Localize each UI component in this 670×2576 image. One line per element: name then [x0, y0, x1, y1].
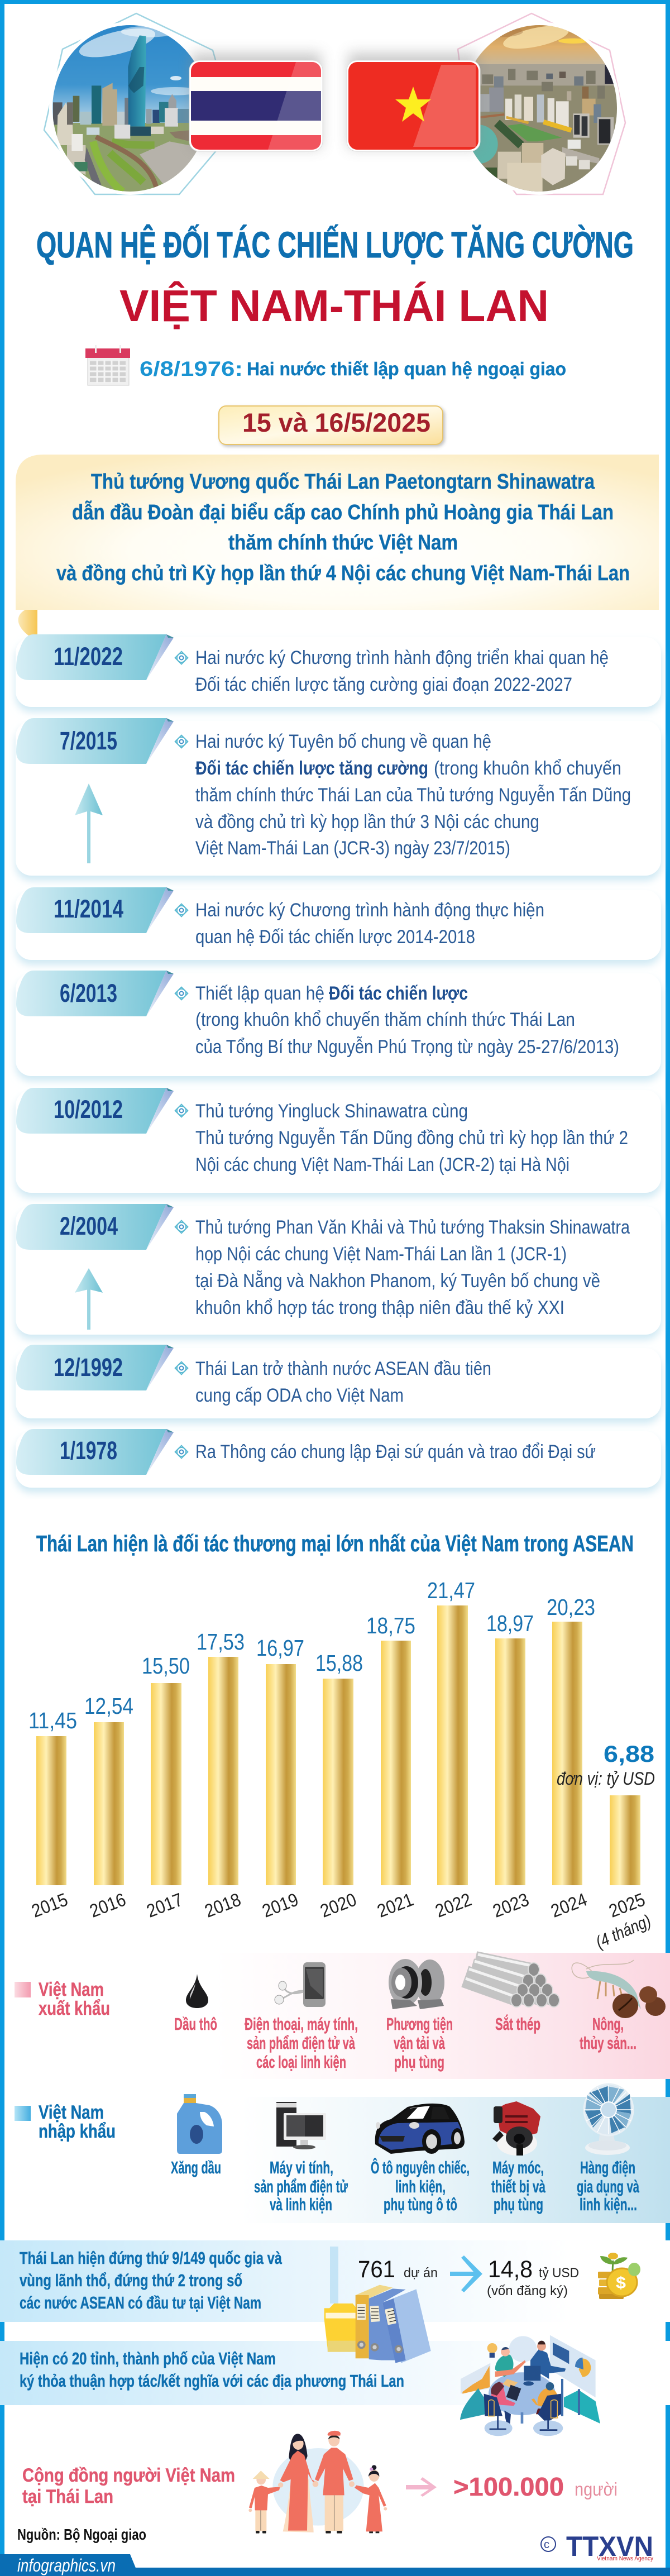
export labels: Nông, [592, 2014, 624, 2034]
bar chart: trade value: 11,45 [28, 1708, 77, 1733]
bar chart: trade value: 2017 [143, 1889, 185, 1922]
timeline: 7/2015: (trong khuôn khổ chuyến [434, 758, 621, 779]
bar chart: trade value: 2024 [548, 1889, 590, 1922]
timeline: 7/2015: và đồng chủ trì kỳ họp lần thứ 3 Nội các chung [195, 811, 539, 833]
visit summary panel: thăm chính thức Việt Nam [228, 531, 458, 555]
panel: twin provinces [0, 2341, 670, 2405]
founding date: 6/8/1976: [140, 357, 243, 380]
timeline: 11/2022: Hai nước ký Chương trình hành động triển khai quan hệ [195, 647, 609, 668]
timeline: 2/2004: khuôn khổ hợp tác trong thập niên đầu thế kỷ XXI [195, 1297, 564, 1318]
timeline: 11/2022: 11/2022 [54, 642, 123, 671]
woman [280, 2434, 317, 2532]
bar chart: trade value: 12,54 [84, 1693, 133, 1719]
export heading: xuất khẩu [39, 1998, 110, 2019]
provinces text: Hiện có 20 tỉnh, thành phố của Việt Nam [20, 2349, 276, 2368]
visit summary panel [16, 455, 659, 641]
timeline: 10/2012 [16, 1088, 661, 1193]
import labels: Ô tô nguyên chiếc, [371, 2157, 470, 2177]
timeline: 2/2004: họp Nội các chung Việt Nam-Thái Lan lần 1 (JCR-1) [195, 1244, 567, 1265]
timeline: 12/1992: Thái Lan trở thành nước ASEAN đầu tiên [195, 1358, 491, 1379]
illustration: family [248, 2431, 387, 2534]
import heading: Việt Nam [39, 2102, 104, 2123]
icon: phone and earphones [275, 1962, 326, 2007]
provinces text: ký thỏa thuận hợp tác/kết nghĩa với các địa phương Thái Lan [20, 2371, 404, 2391]
timeline: 12/1992: 12/1992 [54, 1353, 123, 1382]
export labels: thủy sản... [580, 2033, 636, 2053]
flag: Thailand [189, 53, 323, 151]
import labels: sản phẩm điện tử [254, 2177, 348, 2196]
icon: folder and binders [324, 2285, 431, 2363]
export labels: Điện thoại, máy tính, [245, 2014, 358, 2034]
bar chart: trade value: 20,23 [547, 1594, 595, 1620]
logo: TTXVN: TTXVN [566, 2531, 653, 2562]
timeline: 11/2022: Đối tác chiến lược tăng cường giai đoạn 2022-2027 [195, 674, 572, 695]
import labels: linh kiện, [395, 2177, 446, 2196]
timeline: 7/2015 [16, 718, 661, 876]
panel: Vietnam imports [0, 2084, 670, 2223]
bar chart: trade value: 16,97 [256, 1635, 304, 1661]
import labels: phụ tùng ô tô [384, 2195, 457, 2214]
community text: Cộng đồng người Việt Nam [22, 2465, 235, 2486]
footer bar [0, 2554, 670, 2576]
timeline: 12/1992 [16, 1345, 661, 1418]
timeline: 7/2015: Đối tác chiến lược tăng cường [195, 758, 428, 779]
timeline: 11/2022 [16, 634, 661, 707]
photo: Hanoi skyline [458, 13, 625, 197]
timeline: 10/2012: 10/2012 [54, 1095, 123, 1124]
arrow [450, 2255, 482, 2292]
date pill: 15 và 16/5/2025 [242, 408, 430, 437]
panel: investment [0, 2240, 670, 2322]
bar chart: trade value: 2016 [87, 1889, 128, 1922]
bar chart: trade value: (4 tháng) [593, 1910, 654, 1952]
timeline: 11/2014: Hai nước ký Chương trình hành động thực hiện [195, 900, 544, 921]
bar chart: trade value: 15,50 [142, 1653, 190, 1679]
icon: car [375, 2104, 465, 2154]
bar chart: trade value: 2022 [432, 1889, 474, 1922]
import labels: Máy móc, [492, 2158, 544, 2177]
icon: coins: $ [616, 2274, 626, 2292]
bar chart: trade value: 2019 [259, 1889, 301, 1922]
bar chart: trade value: 2023 [490, 1889, 532, 1922]
source: Nguồn: Bộ Ngoại giao [17, 2526, 146, 2543]
timeline: 7/2015: Việt Nam-Thái Lan (JCR-3) ngày 23/7/2015) [195, 838, 510, 859]
icon: shrimp and coffee beans [572, 1960, 666, 2018]
export labels: Phương tiện [386, 2014, 453, 2034]
icon: crude oil drop [186, 1974, 208, 2008]
timeline: 1/1978: Ra Thông cáo chung lập Đại sứ quán và trao đổi Đại sứ [195, 1441, 596, 1463]
founding date [140, 357, 566, 380]
investment text: vùng lãnh thổ, đứng thứ 2 trong số [20, 2271, 242, 2290]
timeline: 1/1978 [16, 1429, 661, 1488]
import heading: nhập khẩu [39, 2121, 116, 2142]
import labels: Máy vi tính, [270, 2158, 333, 2177]
timeline: 2/2004 [16, 1204, 661, 1335]
investment figures [358, 2256, 579, 2298]
arrow [406, 2477, 437, 2497]
export heading: Việt Nam [39, 1979, 104, 2000]
bar chart: trade value: 2018 [202, 1889, 243, 1922]
export heading [15, 1979, 110, 2019]
community figure: người [575, 2479, 618, 2499]
investment text: các nước ASEAN có đầu tư tại Việt Nam [20, 2293, 261, 2312]
investment figures: tỷ USD [539, 2266, 579, 2281]
footer bar: infographics.vn [17, 2555, 116, 2575]
investment figures: dự án [404, 2266, 438, 2281]
investment figures: 761 [358, 2256, 395, 2283]
export labels: sản phẩm điện tử và [247, 2033, 355, 2053]
investment text: Thái Lan hiện đứng thứ 9/149 quốc gia và [20, 2248, 283, 2268]
import labels: và linh kiện [270, 2195, 332, 2214]
logo: TTXVN: c [544, 2539, 549, 2551]
panel: Vietnam exports [0, 1953, 670, 2079]
boy [249, 2470, 280, 2534]
photo: Bangkok skyline [44, 13, 235, 197]
import labels: Xăng dầu [171, 2158, 221, 2177]
community figure [453, 2472, 618, 2501]
timeline: 12/1992: cung cấp ODA cho Việt Nam [195, 1385, 404, 1406]
bar chart: trade value: 18,97 [486, 1610, 534, 1636]
investment figures: (vốn đăng ký) [487, 2283, 568, 2298]
girl [355, 2465, 386, 2533]
timeline: 6/2013: 6/2013 [60, 979, 117, 1007]
export labels: phụ tùng [394, 2052, 444, 2072]
timeline: 2/2004: 2/2004 [60, 1212, 118, 1240]
import labels: phụ tùng [494, 2195, 543, 2214]
import labels: linh kiện... [580, 2195, 637, 2214]
man [315, 2431, 353, 2534]
export labels: Dầu thô [174, 2014, 217, 2034]
founding date: Hai nước thiết lập quan hệ ngoại giao [247, 359, 566, 379]
export labels: các loại linh kiện [256, 2052, 346, 2072]
timeline: 7/2015: 7/2015 [60, 727, 117, 755]
visit summary panel: Thủ tướng Vương quốc Thái Lan Paetongtarn Shinawatra [91, 470, 595, 494]
import labels: Hàng điện [580, 2158, 635, 2177]
timeline: 6/2013 [16, 971, 661, 1076]
community figure: >100.000 [453, 2472, 564, 2501]
export labels: vận tải và [394, 2033, 445, 2053]
bar chart: trade value: 15,88 [315, 1650, 363, 1676]
investment text [20, 2248, 283, 2312]
icon: brake discs [389, 1959, 444, 2009]
bar chart: trade value: 6,88 [604, 1741, 654, 1767]
community text: tại Thái Lan [22, 2486, 113, 2507]
icon: coins [598, 2253, 640, 2299]
bar chart: trade value: 18,75 [366, 1613, 415, 1638]
timeline: 6/2013: Thiết lập quan hệ [195, 983, 324, 1004]
icon: engine [492, 2101, 540, 2156]
import heading [15, 2102, 116, 2142]
icon: desktop computer [276, 2102, 326, 2149]
timeline: 7/2015: Hai nước ký Tuyên bố chung về quan hệ [195, 731, 491, 752]
community text [22, 2465, 235, 2507]
date pill [219, 406, 443, 445]
bar chart: trade value: 2025 [606, 1889, 648, 1922]
timeline: 11/2014: 11/2014 [54, 895, 123, 923]
icon: electric fan [584, 2084, 633, 2155]
bar chart: trade value: đơn vị: tỷ USD [557, 1769, 655, 1789]
bar chart: trade value: 17,53 [197, 1629, 245, 1655]
import labels [171, 2157, 639, 2214]
import labels: thiết bị và [491, 2177, 546, 2196]
timeline: 2/2004: tại Đà Nẵng và Nakhon Phanom, ký Tuyên bố chung về [195, 1270, 600, 1292]
timeline: 1/1978: 1/1978 [60, 1436, 117, 1465]
icon: fuel bottle [177, 2094, 222, 2154]
illustration: meeting [460, 2335, 600, 2436]
title: VIỆT NAM-THÁI LAN [119, 281, 549, 331]
timeline: 11/2014: quan hệ Đối tác chiến lược 2014-2018 [195, 926, 475, 948]
logo: TTXVN: Vietnam News Agency [597, 2555, 653, 2562]
export labels: Sắt thép [495, 2014, 540, 2034]
bar chart: trade value: 2021 [374, 1889, 416, 1922]
icon: steel pipes [463, 1954, 559, 2007]
investment figures: 14,8 [488, 2256, 533, 2283]
timeline: 11/2014 [16, 887, 661, 960]
timeline: 10/2012: Thủ tướng Yingluck Shinawatra cùng [195, 1101, 468, 1122]
bar chart: trade value: 2015 [28, 1889, 70, 1922]
timeline: 6/2013: Đối tác chiến lược [329, 983, 468, 1004]
export labels [174, 2014, 636, 2072]
flag: Vietnam [347, 53, 480, 151]
title [36, 224, 634, 331]
provinces text [20, 2349, 404, 2391]
bar chart: trade value [28, 1578, 655, 1952]
icon: calendar [85, 345, 130, 385]
bar chart: trade value: 2020 [317, 1889, 359, 1922]
timeline: 6/2013: (trong khuôn khổ chuyến thăm chính thức Thái Lan [195, 1009, 575, 1030]
timeline: 10/2012: Nội các chung Việt Nam-Thái Lan (JCR-2) tại Hà Nội [195, 1154, 570, 1175]
bar chart: trade value: 21,47 [427, 1578, 475, 1603]
